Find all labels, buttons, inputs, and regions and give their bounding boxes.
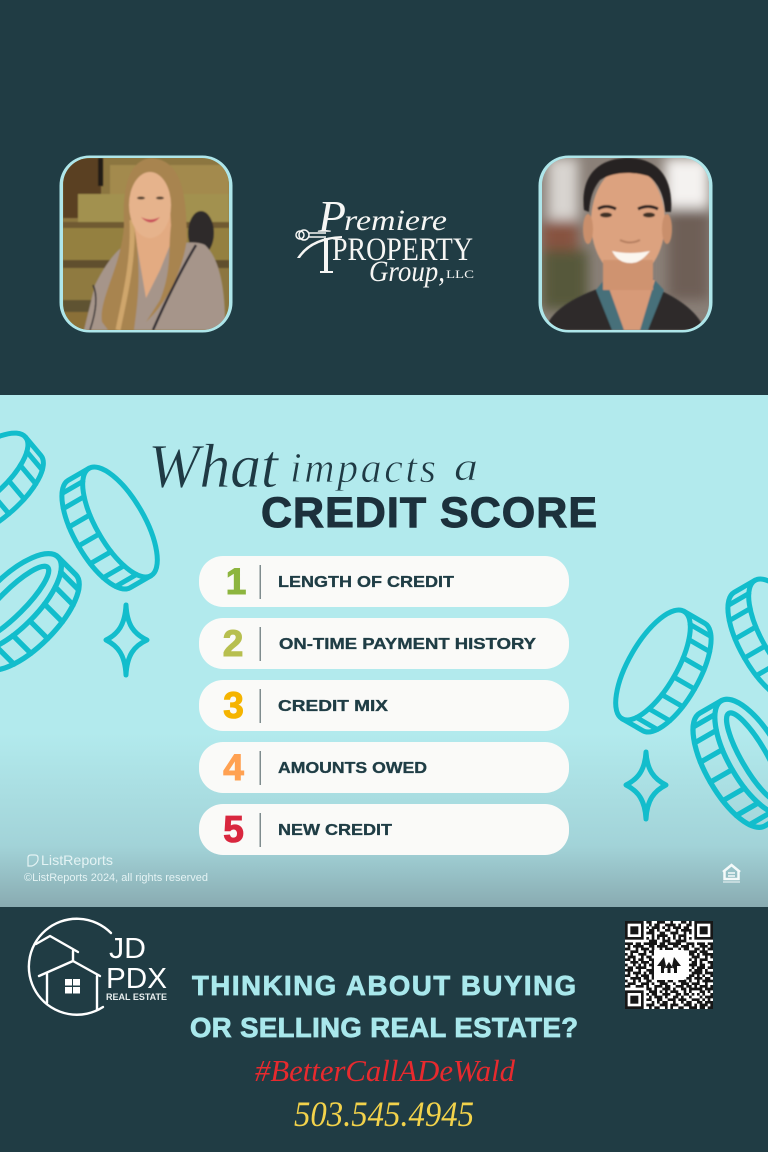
photo: male agent (538, 156, 712, 332)
list item 3: CREDIT MIX (278, 698, 388, 715)
icon: QR center arrows (657, 957, 681, 973)
coins left group (0, 430, 160, 672)
icon: key (296, 230, 326, 240)
list item 2: 2 (223, 623, 243, 664)
list item 2: ON-TIME PAYMENT HISTORY (279, 636, 536, 653)
title script line: impacts (290, 446, 436, 492)
list item 5 (199, 804, 569, 855)
list item 5: 5 (223, 809, 244, 850)
logo: Premiere Property Group (296, 191, 474, 288)
icon: houses (36, 936, 100, 1010)
icon: equal housing (723, 865, 740, 882)
headline: thinking about buying: THINKING ABOUT BUYING (192, 970, 576, 1001)
headline: thinking about buying (190, 970, 578, 1043)
list item 4: 4 (223, 747, 244, 788)
list item 1: 1 (226, 561, 246, 602)
icon: right sparkle (626, 752, 666, 819)
list item 2 (199, 618, 569, 669)
QR code (625, 921, 713, 1009)
photo: woman agent (60, 156, 232, 332)
list item 4 (199, 742, 569, 793)
list item 5: NEW CREDIT (278, 822, 392, 839)
logo: JD PDX Real Estate (29, 919, 167, 1015)
logo: Premiere Property Group: Group, (369, 255, 445, 288)
title main line: CREDIT SCORE (261, 489, 597, 537)
logo: Premiere Property Group: LLC (446, 267, 474, 281)
hashtag: #BetterCallADeWald (255, 1053, 515, 1088)
ListReports logo and copyright: ©ListReports 2024, all rights reserved (24, 872, 208, 884)
coins right group (613, 576, 768, 830)
ListReports logo and copyright: ListReports (41, 852, 113, 868)
list item 4: AMOUNTS OWED (278, 760, 427, 777)
title script line (148, 433, 478, 501)
logo: JD PDX Real Estate: PDX (106, 963, 167, 995)
list item 1 (199, 556, 569, 607)
logo: Premiere Property Group: PROPERTY (332, 232, 473, 268)
list item 3: 3 (223, 685, 244, 726)
phone number: 503.545.4945 (294, 1094, 474, 1134)
title script line: a (454, 444, 478, 489)
headline: thinking about buying: OR SELLING REAL ESTATE? (190, 1012, 578, 1043)
icon: left sparkle (106, 605, 147, 675)
list item 1: LENGTH OF CREDIT (278, 574, 454, 591)
logo: Premiere Property Group: remiere (344, 204, 447, 237)
logo: JD PDX Real Estate: JD (109, 933, 146, 965)
logo: JD PDX Real Estate: REAL ESTATE (106, 992, 167, 1002)
logo: Premiere Property Group: P (317, 191, 346, 242)
title script line: What (148, 433, 280, 501)
panel: credit score infographic (0, 395, 768, 907)
ListReports logo and copyright (24, 852, 208, 884)
list item 3 (199, 680, 569, 731)
